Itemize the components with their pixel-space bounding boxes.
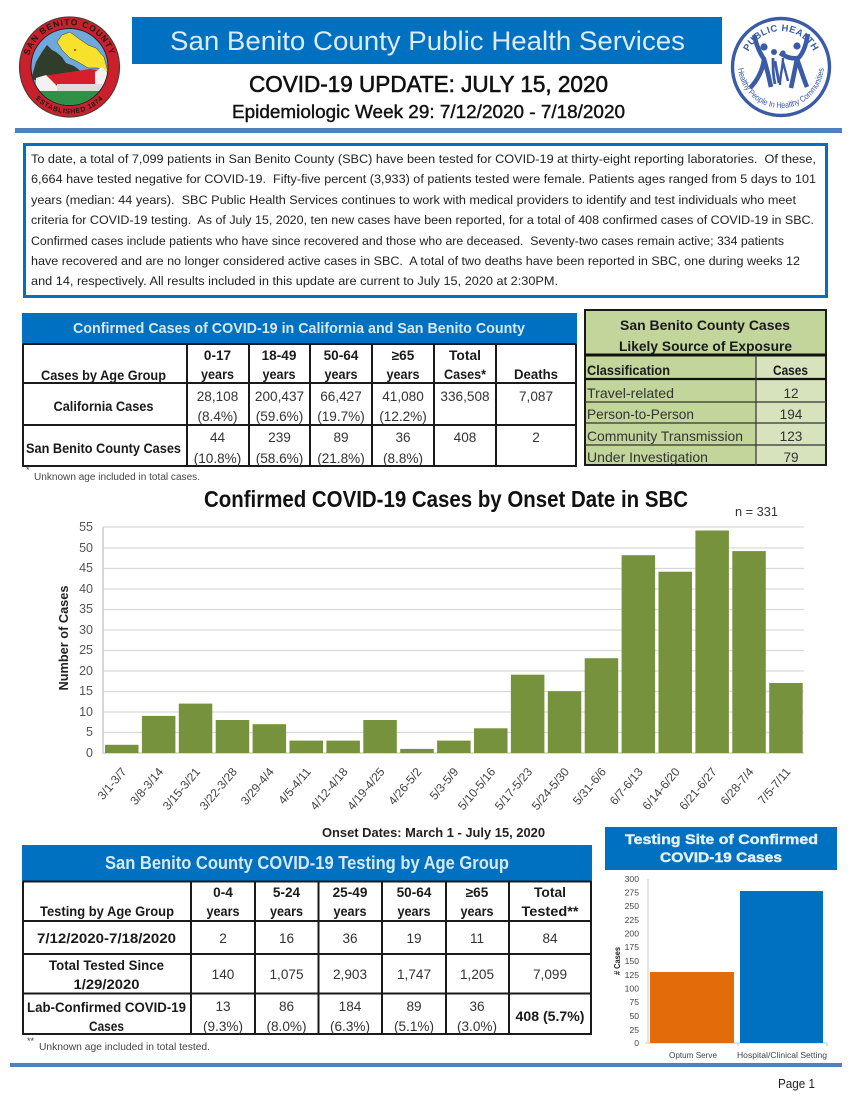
table: confirmed cases in California and San Benito County: 239 [268, 430, 291, 445]
table: confirmed cases in California and San Benito County: 36 [395, 430, 411, 445]
summary text box: years (median: 44 years). SBC Public Health Services continues to work with medical providers to identify and test individuals who meet [31, 193, 797, 207]
table: likely source of exposure: 123 [780, 429, 802, 444]
table: testing by age group: 2 [219, 931, 227, 946]
footnote: total tested [27, 1036, 210, 1053]
table: confirmed cases in California and San Benito County: 7,087 [519, 389, 553, 404]
table: confirmed cases in California and San Benito County: (21.8%) [317, 451, 365, 466]
table: testing by age group: Lab-Confirmed COVID-19 [27, 1000, 186, 1015]
table: testing by age group: years [206, 904, 240, 919]
bar chart: testing site: 50 [629, 1011, 639, 1021]
table: testing by age group: (9.3%) [203, 1019, 243, 1034]
table: testing by age group: (8.0%) [266, 1019, 307, 1034]
table: testing by age group: 1,075 [269, 967, 304, 982]
logo: Public Health: PUBLIC HEALTH [743, 24, 819, 52]
table: testing by age group: Total [534, 885, 566, 900]
table: testing by age group: 36 [469, 999, 485, 1014]
sample size note: n = 331 [735, 505, 778, 519]
x axis labels: 5/24-5/30 [529, 765, 572, 813]
bar chart: testing site: 300 [625, 874, 639, 884]
table: likely source of exposure: Cases [773, 363, 808, 378]
table: likely source of exposure: Person-to-Person [587, 407, 694, 422]
table: testing by age group: 408 (5.7%) [516, 1009, 584, 1024]
y axis labels [79, 520, 93, 760]
table: testing by age group: 16 [279, 931, 294, 946]
panel heading: COVID-19 Cases [660, 850, 782, 865]
x axis title: Onset Dates: March 1 - July 15, 2020 [322, 826, 545, 840]
table: confirmed cases in California and San Benito County: Deaths [514, 367, 558, 382]
table: testing by age group: 19 [406, 931, 422, 946]
x axis labels: 4/5-4/11 [275, 765, 314, 807]
table: confirmed cases in California and San Benito County: (19.7%) [317, 409, 365, 424]
table: confirmed cases in California and San Benito County: years [324, 367, 358, 382]
summary text box: criteria for COVID-19 testing. As of July 15, 2020, ten new cases have been reported, for a total of 408 confirmed cases of COVID-19 in SBC. [31, 213, 814, 227]
table heading: Confirmed Cases of COVID-19 in California and San Benito County [73, 320, 526, 337]
table: testing by age group: (3.0%) [457, 1019, 497, 1034]
bar chart: testing site: Hospital/Clinical Setting [737, 1050, 827, 1060]
table: testing by age group: (6.3%) [330, 1019, 370, 1034]
bar chart: testing site: 150 [625, 956, 639, 966]
y axis labels: 50 [79, 541, 93, 555]
table: testing by age group: Cases [89, 1019, 124, 1034]
panel heading [605, 827, 837, 870]
bars [105, 530, 803, 753]
table: confirmed cases in California and San Benito County: ≥65 [392, 348, 415, 363]
x axis labels: 4/12-4/18 [307, 765, 351, 813]
table heading [22, 845, 592, 881]
table: confirmed cases in California and San Benito County: 44 [210, 430, 225, 445]
x axis labels: 3/22-3/28 [197, 765, 240, 813]
y axis labels: 20 [79, 664, 93, 678]
table: confirmed cases in California and San Benito County: 41,080 [382, 389, 424, 404]
table: testing by age group: 1/29/2020 [74, 977, 140, 992]
table: likely source of exposure [585, 310, 826, 466]
y axis labels: 0 [86, 746, 93, 760]
table heading [22, 313, 577, 344]
table: confirmed cases in California and San Benito County: 89 [333, 430, 349, 445]
table: likely source of exposure: San Benito County Cases [620, 318, 790, 333]
table: likely source of exposure: Travel-related [587, 386, 674, 401]
table: testing by age group: years [398, 904, 430, 919]
footer rule [10, 1063, 842, 1067]
table: confirmed cases in California and San Benito County: 50-64 [324, 348, 359, 363]
table: testing by age group: 7/12/2020-7/18/2020 [37, 931, 176, 946]
table: confirmed cases in California and San Benito County: (58.6%) [256, 451, 303, 466]
table: testing by age group: Testing by Age Group [40, 904, 174, 919]
x axis labels: 5/31-6/6 [570, 765, 609, 808]
table: testing by age group: years [460, 904, 494, 919]
table: testing by age group: Tested** [522, 904, 579, 919]
table: testing by age group: 36 [342, 931, 358, 946]
y axis labels: 15 [79, 684, 93, 698]
table: testing by age group [22, 845, 592, 1034]
table: testing by age group: 25-49 [333, 885, 368, 900]
x axis labels: 3/1-3/7 [95, 765, 130, 803]
table: testing by age group: 0-4 [213, 885, 233, 900]
y axis labels: 5 [86, 725, 93, 739]
x axis labels: 6/14-6/20 [639, 765, 683, 813]
table: confirmed cases in California and San Benito County: 0-17 [204, 348, 231, 363]
logo: San Benito County seal: ESTABLISHED 1874 [36, 96, 102, 114]
table: testing by age group: 5-24 [273, 885, 301, 900]
table: testing by age group: 7,099 [533, 967, 567, 982]
table: confirmed cases in California and San Benito County [22, 313, 577, 466]
y axis labels: 30 [79, 623, 93, 637]
x axis labels: 4/19-4/25 [344, 765, 388, 813]
table: testing by age group: 2,903 [333, 967, 367, 982]
y axis labels: 45 [79, 561, 93, 575]
table: testing by age group: 89 [406, 999, 422, 1014]
table: confirmed cases in California and San Benito County: Cases* [444, 367, 487, 382]
x axis labels: 5/17-5/23 [492, 765, 535, 813]
x axis labels: 7/5-7/11 [755, 765, 794, 807]
table: testing by age group: Total Tested Since [49, 958, 164, 973]
table: confirmed cases in California and San Benito County: (10.8%) [194, 451, 241, 466]
table: testing by age group: 50-64 [397, 885, 432, 900]
footnote: total cases: Unknown age included in total cases. [34, 472, 200, 483]
x axis labels: 4/26-5/2 [385, 765, 425, 808]
bar chart: testing site: 75 [629, 997, 639, 1007]
table: likely source of exposure: Classification [587, 363, 670, 378]
y axis labels: 55 [79, 520, 93, 534]
bar chart: testing site: # Cases [613, 947, 622, 975]
table: confirmed cases in California and San Benito County: 200,437 [255, 389, 304, 404]
title banner: San Benito County Public Health Services [170, 26, 685, 56]
y axis title: Number of Cases [57, 585, 71, 690]
chart title: Confirmed COVID-19 Cases by Onset Date in SBC [204, 486, 688, 512]
table: likely source of exposure: 194 [780, 407, 803, 422]
y axis labels: 10 [79, 705, 93, 719]
summary text box [24, 144, 826, 296]
table: confirmed cases in California and San Benito County: Cases by Age Group [41, 368, 166, 383]
x axis labels: 6/28-7/4 [718, 765, 757, 808]
table: testing by age group: 13 [215, 999, 231, 1014]
table: confirmed cases in California and San Benito County: (59.6%) [256, 409, 303, 424]
table: testing by age group: 184 [339, 999, 362, 1014]
x axis labels: 6/7-6/13 [607, 765, 646, 808]
x axis labels: 5/3-5/9 [427, 765, 462, 803]
footnote: total cases [26, 465, 200, 483]
footnote: total tested: Unknown age included in total tested. [39, 1042, 210, 1053]
footnote: total tested: ** [27, 1036, 35, 1046]
table: confirmed cases in California and San Benito County: Total [449, 348, 481, 363]
table: confirmed cases in California and San Benito County: California Cases [54, 399, 154, 414]
table: confirmed cases in California and San Benito County: (8.8%) [383, 451, 423, 466]
table: likely source of exposure: Likely Source of Exposure [619, 339, 792, 354]
bar chart: testing site: 0 [634, 1038, 639, 1048]
x axis labels: 6/21-6/27 [676, 765, 720, 813]
header rule [15, 128, 842, 133]
table: confirmed cases in California and San Benito County: years [386, 367, 420, 382]
y axis labels: 40 [79, 582, 93, 596]
logo: San Benito County seal [18, 16, 120, 118]
x axis labels: 5/10-5/16 [455, 765, 499, 813]
summary text box: 6,664 have tested negative for COVID-19. Fifty-five percent (3,933) of patients tested were female. Patients ages ranged from 5 days to 101 [31, 172, 816, 186]
footnote: total cases: * [26, 465, 30, 475]
bar chart: testing site: 275 [625, 888, 639, 898]
table: confirmed cases in California and San Benito County: years [201, 367, 234, 382]
table heading: San Benito County COVID-19 Testing by Age Group [105, 853, 509, 873]
table: confirmed cases in California and San Benito County: 66,427 [320, 389, 362, 404]
summary text box: have recovered and are no longer considered active cases in SBC. A total of two deaths have been reported in SBC, one during weeks 12 [31, 254, 800, 268]
x axis labels: 3/29-4/4 [238, 765, 277, 808]
table: testing by age group: 1,747 [397, 967, 431, 982]
summary text box: and 14, respectively. All results included in this update are current to July 15, 2020 at 2:30PM. [31, 274, 558, 288]
table: testing by age group: 1,205 [460, 967, 494, 982]
table: testing by age group: years [334, 904, 366, 919]
x axis labels: 3/8-3/14 [127, 765, 166, 808]
table: confirmed cases in California and San Benito County: (12.2%) [379, 409, 427, 424]
table: confirmed cases in California and San Benito County: 28,108 [197, 389, 238, 404]
panel: testing site of confirmed cases [605, 827, 837, 1060]
x axis labels: 3/15-3/21 [160, 765, 203, 813]
subtitle: epidemiologic week: Epidemiologic Week 29: 7/12/2020 - 7/18/2020 [232, 102, 625, 122]
table: confirmed cases in California and San Benito County: (8.4%) [197, 409, 238, 424]
title banner [132, 17, 722, 64]
bar chart: testing site: 200 [625, 928, 639, 938]
table: confirmed cases in California and San Benito County: 408 [454, 430, 476, 445]
panel heading: Testing Site of Confirmed [625, 832, 818, 847]
bar chart: testing site: 125 [625, 970, 639, 980]
bar chart: cases by onset date [57, 520, 804, 840]
bar chart: testing site [613, 874, 827, 1060]
y axis labels: 25 [79, 643, 93, 657]
y axis labels: 35 [79, 602, 93, 616]
table: confirmed cases in California and San Benito County: 2 [532, 430, 540, 445]
table: confirmed cases in California and San Benito County: San Benito County Cases [26, 441, 181, 456]
table: testing by age group: (5.1%) [394, 1019, 434, 1034]
table: testing by age group: 140 [212, 967, 235, 982]
table: testing by age group: 11 [470, 931, 484, 946]
table: confirmed cases in California and San Benito County: 336,508 [440, 389, 490, 404]
bar chart: testing site: 25 [629, 1025, 639, 1035]
table: likely source of exposure: 12 [783, 386, 799, 401]
table: testing by age group: years [270, 904, 303, 919]
logo: San Benito County seal: SAN BENITO COUNTY [24, 19, 116, 55]
table: testing by age group: ≥65 [466, 885, 489, 900]
bar chart: testing site: 225 [625, 915, 639, 925]
x axis labels [95, 765, 794, 813]
table: testing by age group: 86 [279, 999, 294, 1014]
summary text box: To date, a total of 7,099 patients in San Benito County (SBC) have been tested for COVID-19 at thirty-eight reporting laboratories. Of these, [31, 152, 816, 166]
table: likely source of exposure: Community Transmission [587, 429, 743, 444]
logo: Public Health: Healthy People In Healthy Communities [738, 68, 824, 108]
table: testing by age group: 84 [542, 931, 558, 946]
bar chart: testing site: 175 [625, 942, 639, 952]
bar chart: testing site: Optum Serve [669, 1050, 717, 1060]
page number: Page 1 [778, 1077, 815, 1091]
bar chart: testing site: 100 [625, 984, 639, 994]
table: likely source of exposure: 79 [783, 450, 799, 465]
subtitle: update date: COVID-19 UPDATE: JULY 15, 2020 [249, 71, 608, 97]
table: confirmed cases in California and San Benito County: years [262, 367, 296, 382]
logo: Public Health [730, 16, 832, 118]
table: confirmed cases in California and San Benito County: 18-49 [262, 348, 297, 363]
summary text box: Confirmed cases include patients who have since recovered and those who are deceased. Seventy-two cases remain active; 334 patients [31, 234, 784, 248]
table: likely source of exposure: Under Investigation [587, 450, 708, 465]
bar chart: testing site: 250 [625, 901, 639, 911]
